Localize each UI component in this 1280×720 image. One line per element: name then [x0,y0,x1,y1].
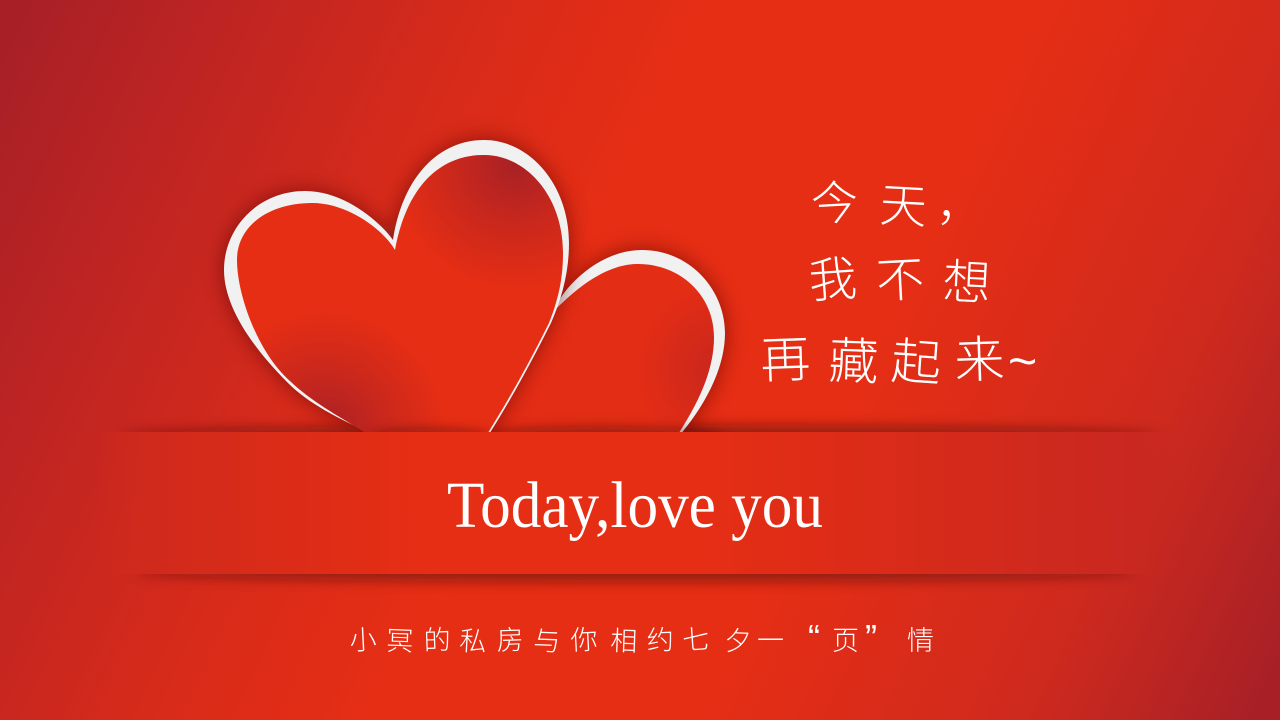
big heart [224,140,569,447]
handwritten message: 我不想 [807,253,992,311]
band shadow top [124,418,1156,432]
handwritten message: 再藏起来~ [759,331,1037,392]
footer line: 小冥的私房与你相约七夕一 [349,624,784,657]
footer line: “ [808,617,820,658]
ribbon band [95,432,1185,574]
footer line: ” [865,617,877,658]
small heart [475,250,725,447]
handwritten message: 今天， [810,176,983,233]
handwritten message [759,176,1037,392]
ribbon title: Today,love you [447,469,823,542]
footer line: 情 [907,626,934,656]
footer line [349,617,934,658]
footer line: 页 [832,626,859,656]
band shadow bottom [138,574,1132,590]
